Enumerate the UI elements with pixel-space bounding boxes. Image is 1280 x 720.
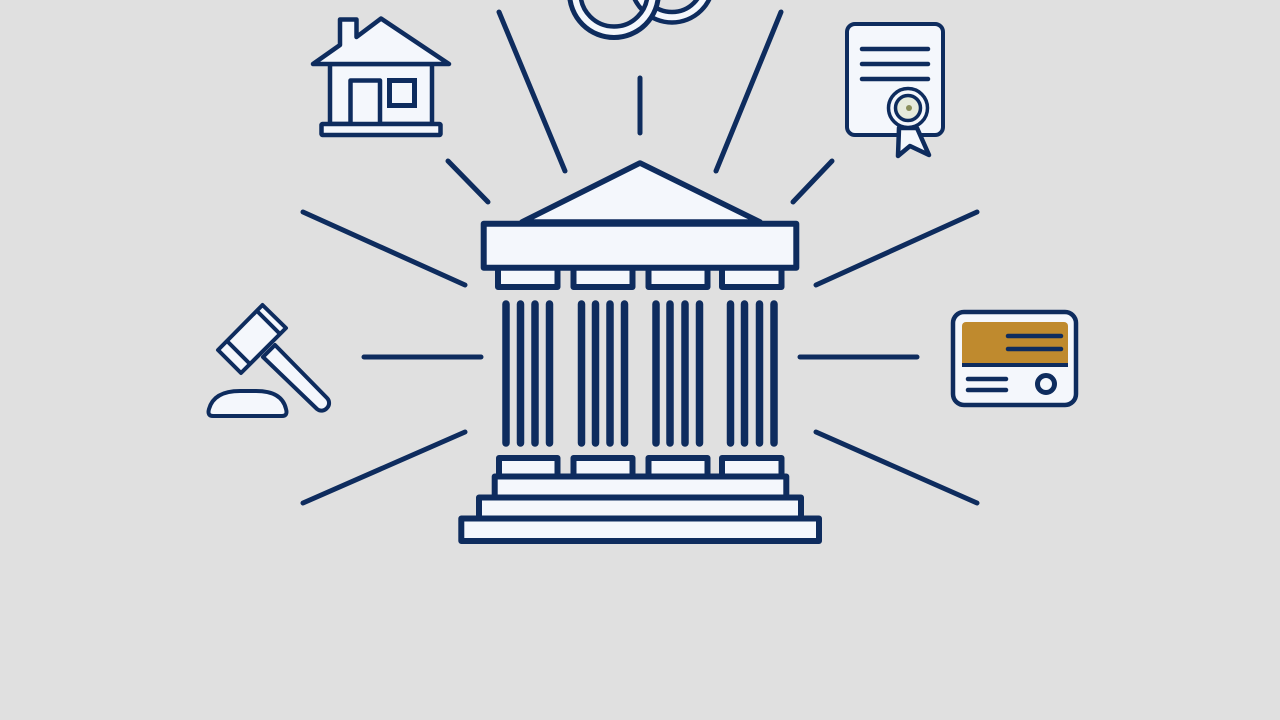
entablature xyxy=(484,224,796,268)
icon: certificate xyxy=(847,24,943,156)
seal ribbon xyxy=(898,128,929,156)
gavel handle xyxy=(263,345,329,411)
icon: courthouse building xyxy=(461,163,819,541)
column bases xyxy=(499,458,782,478)
gavel sound block xyxy=(208,391,286,416)
seal xyxy=(888,88,928,128)
card lower lines xyxy=(968,379,1006,390)
radiating rays xyxy=(303,12,977,503)
icon: house xyxy=(313,18,449,135)
gold panel xyxy=(962,322,1068,365)
house walls xyxy=(330,64,432,124)
front ring xyxy=(570,0,658,38)
steps xyxy=(461,476,819,541)
icon: card xyxy=(953,312,1076,405)
card circle xyxy=(1038,376,1054,392)
top capitals xyxy=(498,268,782,287)
house door xyxy=(350,80,380,124)
gavel head xyxy=(218,305,286,373)
pediment xyxy=(522,163,760,222)
column flutes xyxy=(506,304,774,443)
gavel head bands xyxy=(227,311,280,364)
card header lines xyxy=(1008,336,1061,349)
card body xyxy=(953,312,1076,405)
certificate text lines xyxy=(862,49,928,79)
gold panel rule xyxy=(962,363,1068,367)
back ring xyxy=(630,0,714,22)
house window xyxy=(390,80,414,106)
house roof and chimney xyxy=(313,18,449,64)
house plinth xyxy=(322,124,440,135)
certificate page xyxy=(847,24,943,135)
icon: gavel xyxy=(208,305,329,416)
icon: interlocked rings xyxy=(570,0,714,38)
